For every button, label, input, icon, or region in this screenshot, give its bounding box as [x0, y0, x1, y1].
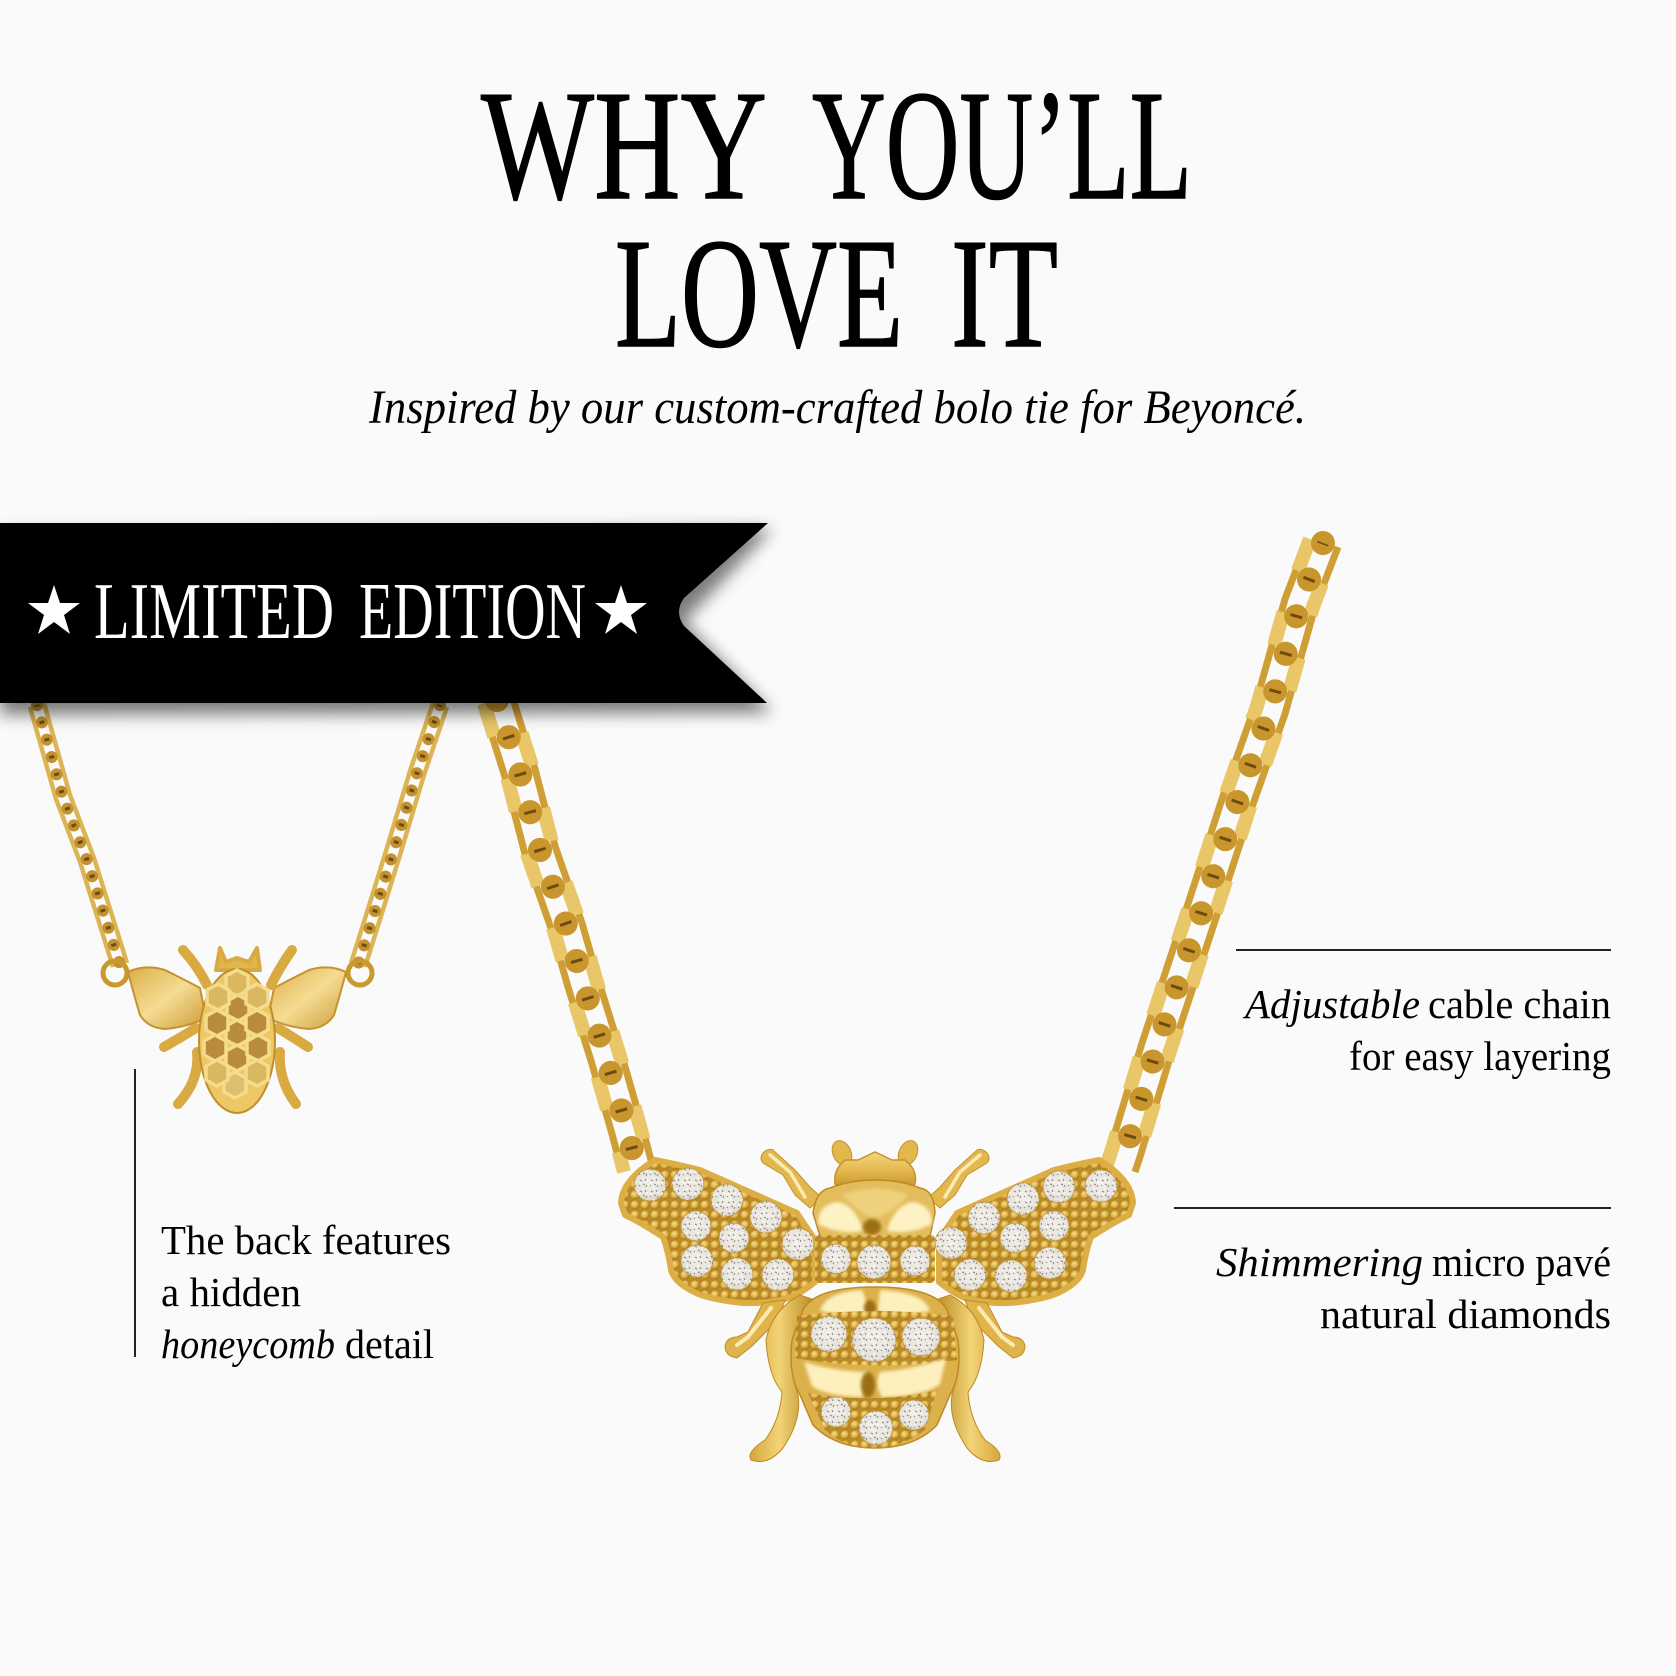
small bee body honeycomb: [199, 969, 275, 1113]
bee wings: [621, 1160, 1133, 1303]
star right: [595, 585, 647, 634]
small necklace: back of bee: [30, 703, 447, 1113]
callout: honeycomb back: [134, 1069, 451, 1367]
chain left strand: [482, 696, 652, 1172]
chain right strand: [1105, 539, 1338, 1172]
title: WHY: [481, 58, 767, 232]
callout: micro pave: natural diamonds: [1320, 1291, 1611, 1337]
callout: adjustable chain: Adjustable: [1242, 981, 1420, 1027]
ribbon text: [94, 568, 586, 656]
subtitle: Inspired by our custom-crafted bolo tie for Beyoncé.: [368, 381, 1306, 434]
large necklace chain: [482, 539, 1338, 1172]
thorax: [813, 1180, 935, 1283]
callout: honeycomb back: detail: [345, 1321, 434, 1367]
callout: micro pave: micro pavé: [1432, 1239, 1611, 1285]
callout: adjustable chain: for easy layering: [1349, 1033, 1611, 1079]
ribbon banner: [0, 523, 768, 703]
callout: micro pave: Shimmering: [1216, 1239, 1423, 1285]
ribbon text: EDITION: [359, 568, 586, 656]
ribbon shadow: [0, 529, 772, 715]
head and antennae: [828, 1137, 922, 1192]
ribbon text: LIMITED: [94, 568, 334, 656]
bee legs: [725, 1149, 1025, 1462]
diamond sparkle: [634, 1168, 1117, 1445]
callout: honeycomb back: a hidden: [161, 1269, 301, 1315]
small bee head: [216, 948, 260, 970]
star left: [28, 585, 80, 634]
callout: micro pave: [1174, 1207, 1611, 1337]
large bee pendant: [621, 1137, 1133, 1462]
small bee wings: [128, 967, 346, 1029]
callout: adjustable chain: [1236, 949, 1611, 1079]
title: IT: [951, 206, 1058, 380]
callout: adjustable chain: cable chain: [1428, 981, 1611, 1027]
title: YOU’LL: [812, 58, 1192, 232]
abdomen: [791, 1287, 959, 1448]
callout: honeycomb back: The back features: [161, 1217, 451, 1263]
diamonds: [634, 1168, 1117, 1445]
small chain right: [351, 703, 447, 967]
title: LOVE: [615, 206, 903, 380]
small chain left: [30, 703, 127, 967]
callout: honeycomb back: honeycomb: [161, 1321, 335, 1367]
small rings: [103, 961, 372, 985]
title: [481, 58, 1192, 380]
small bee legs: [164, 950, 308, 1104]
